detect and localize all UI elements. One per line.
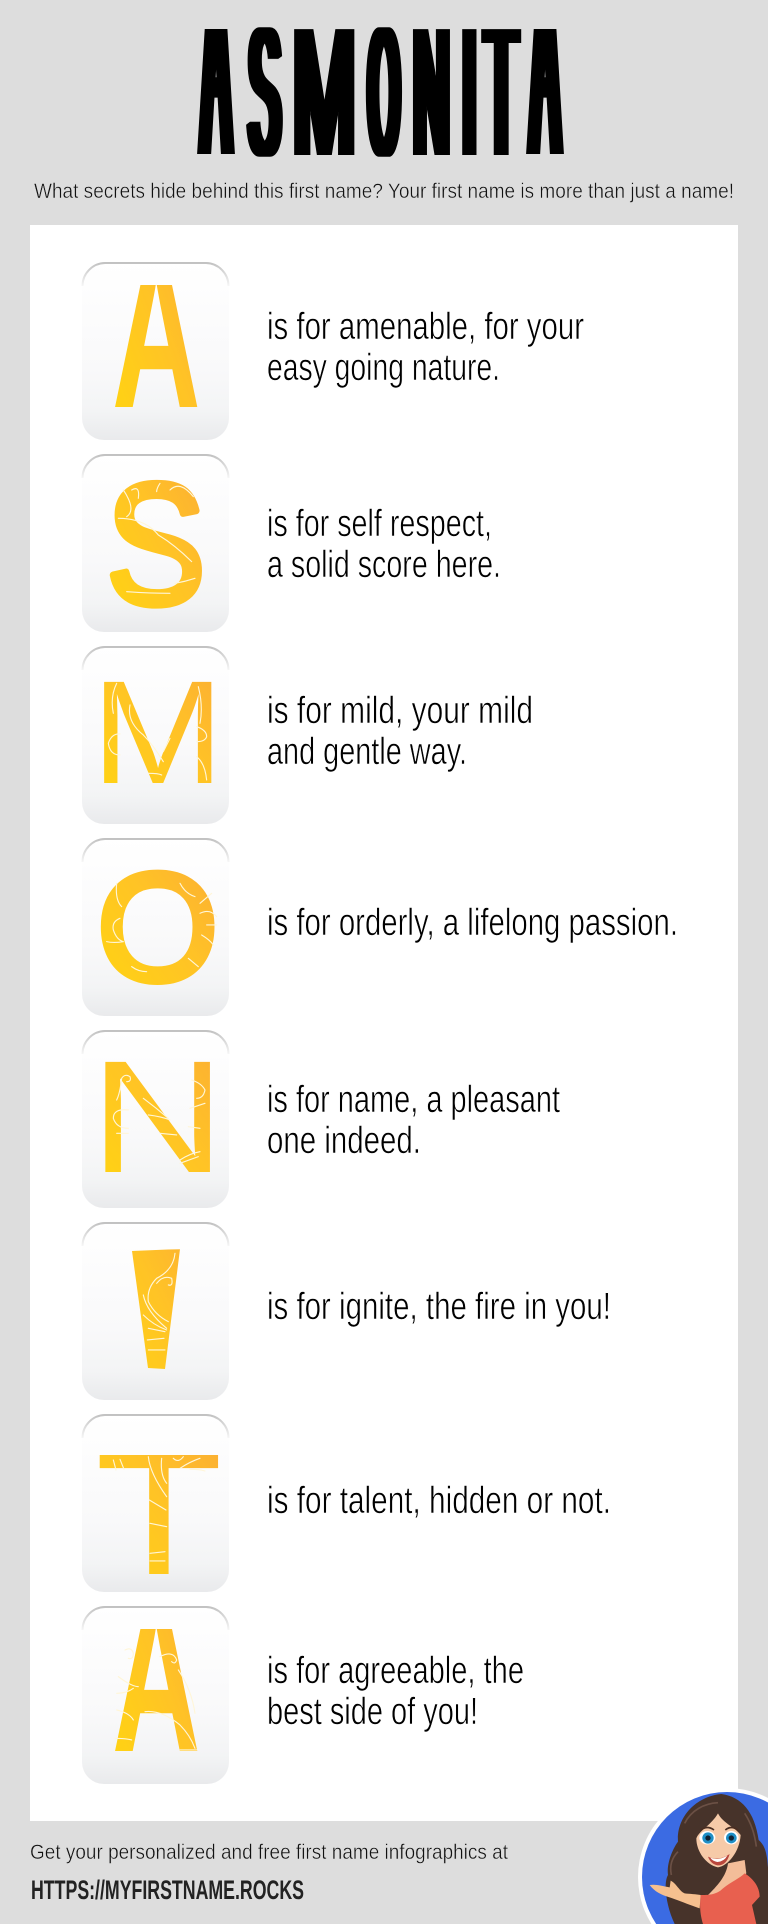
- row A: amenable: [82, 262, 584, 440]
- text: amenable: is for amenable, for your: [267, 306, 584, 348]
- row S: self respect: [82, 449, 501, 641]
- row N: name: [82, 1027, 560, 1208]
- tile with letter S: [82, 449, 229, 641]
- tile with second letter A: [82, 1606, 230, 1784]
- tile with second letter A: A: [112, 1558, 201, 1798]
- text: agreeable: best side of you!: [267, 1691, 478, 1733]
- text: name: one indeed.: [267, 1120, 421, 1162]
- text: amenable: [267, 306, 584, 389]
- title: [197, 0, 564, 194]
- text: name: is for name, a pleasant: [267, 1079, 560, 1121]
- footer prompt: Get your personalized and free first name infographics at: [30, 1841, 508, 1864]
- row T: talent: [82, 1414, 611, 1611]
- tile with letter M: M: [91, 650, 224, 815]
- tile with letter N: N: [90, 1027, 225, 1206]
- text: amenable: easy going nature.: [267, 347, 500, 389]
- row A: agreeable: [82, 1606, 523, 1784]
- text: mild: is for mild, your mild: [267, 690, 533, 732]
- footer url: HTTPS://MYFIRSTNAME.ROCKS: [31, 1875, 304, 1905]
- tile with letter A: [82, 262, 230, 440]
- text: talent: is for talent, hidden or not.: [267, 1480, 611, 1522]
- tile with letter T: T: [95, 1417, 223, 1611]
- row O: orderly: [82, 838, 678, 1016]
- text: agreeable: is for agreeable, the: [267, 1650, 524, 1692]
- text: agreeable: [267, 1650, 524, 1733]
- white content panel: [30, 214, 738, 1821]
- text: ignite: is for ignite, the fire in you!: [267, 1286, 611, 1328]
- row M: mild: [82, 646, 533, 824]
- avatar: woman in blue circle: [638, 1788, 768, 1924]
- row I: ignite: [82, 1212, 611, 1406]
- tile with letter S: S: [106, 449, 206, 641]
- tile with letter I: I: [109, 1212, 204, 1406]
- text: self respect: [267, 503, 501, 586]
- tile with letter O: O: [97, 841, 218, 1013]
- text: name: [267, 1079, 560, 1162]
- text: self respect: a solid score here.: [267, 544, 501, 586]
- text: self respect: is for self respect,: [267, 503, 492, 545]
- tile with letter I: [82, 1212, 229, 1406]
- text: mild: and gentle way.: [267, 731, 467, 773]
- tile with letter A: A: [112, 214, 201, 454]
- text: mild: [267, 690, 533, 773]
